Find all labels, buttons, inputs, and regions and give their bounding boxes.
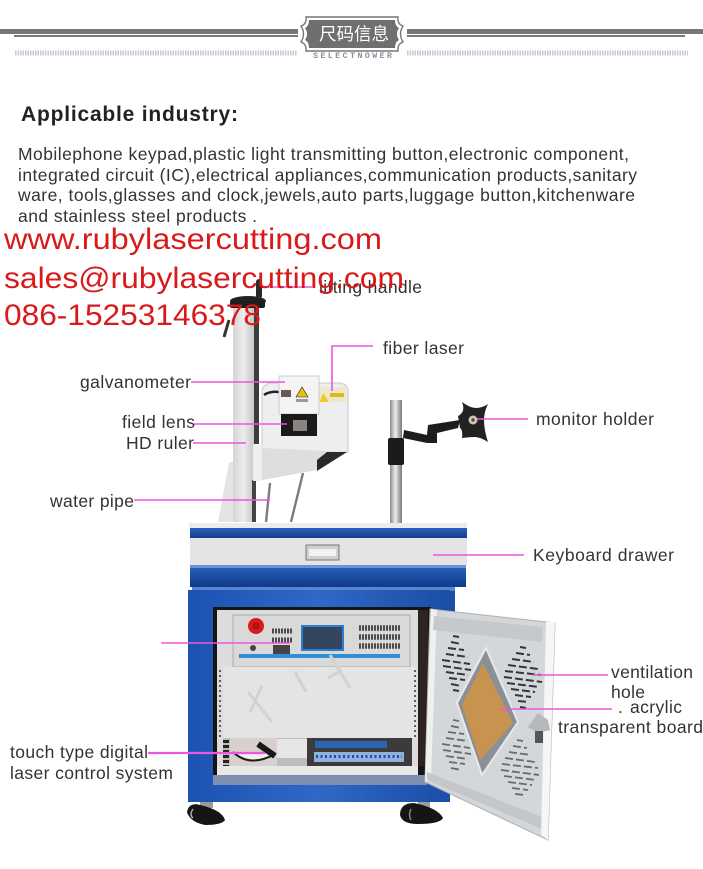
callout: acrylic transparent board: .: [618, 697, 623, 717]
text block: industry description: [17, 144, 637, 226]
text block: industry description: and stainless steel products .: [18, 206, 257, 226]
lower rack components: [230, 738, 412, 766]
callout: lifting handle: lifting handle: [319, 277, 422, 297]
text block: industry description: ware, tools,glasses and clock,jewels,auto parts,luggage button,kitchenware: [17, 185, 635, 205]
caster left: [187, 802, 225, 825]
callout: water pipe: water pipe: [49, 491, 134, 511]
callout: acrylic transparent board: acrylic: [630, 697, 682, 717]
control unit: [233, 615, 410, 667]
callout: ventilation hole: hole: [611, 682, 645, 702]
caster right: [400, 802, 443, 824]
cabinet body: [188, 565, 466, 802]
callout: HD ruler: HD ruler: [126, 433, 194, 453]
text block: industry description: integrated circuit (IC),electrical appliances,communication products,sanitary: [18, 165, 637, 185]
galvanometer box: [279, 376, 319, 414]
ventilation holes: [442, 636, 542, 795]
door: [425, 609, 555, 840]
callout: field lens: field lens: [122, 412, 195, 432]
header badge: [301, 17, 403, 51]
callout: galvanometer: galvanometer: [80, 372, 191, 392]
cabinet top plate: [189, 523, 467, 539]
contact details in red: www.rubylasercutting.com: [3, 223, 382, 256]
header banner: [0, 17, 703, 61]
machine: laser head: [253, 376, 348, 522]
blank rack panel: [220, 655, 417, 738]
contact details in red: sales@rubylasercutting.com: [4, 262, 404, 295]
header badge: 尺码信息: [319, 21, 389, 46]
callout: monitor holder: monitor holder: [536, 409, 654, 429]
callout: touch type digital laser control system: laser control system: [10, 763, 173, 783]
acrylic window: [457, 648, 518, 775]
door lock: [528, 713, 550, 743]
text block: industry description: Mobilephone keypad,plastic light transmitting button,electronic component,: [18, 144, 629, 164]
callout: keyboard drawer: Keyboard drawer: [533, 545, 674, 565]
heading: applicable industry: Applicable industry:: [21, 103, 238, 126]
header subtitle: SELECTNOWER: [313, 51, 393, 61]
callout: HD ruler: [126, 433, 246, 453]
machine: cabinet: [187, 523, 555, 840]
callout: acrylic transparent board: [500, 697, 703, 737]
callout: fiber laser: [332, 338, 464, 391]
keyboard drawer: [190, 538, 467, 565]
machine: laser column: [218, 279, 266, 522]
callout: ventilation hole: ventilation: [611, 662, 693, 682]
callout: acrylic transparent board: transparent board: [558, 717, 703, 737]
field lens: [281, 414, 317, 436]
callout: touch type digital laser control system: touch type digital: [10, 742, 148, 762]
callout: touch type digital laser control system: [10, 742, 265, 783]
contact details in red: [3, 223, 404, 332]
rack frame: [217, 610, 428, 775]
machine: monitor holder: [388, 400, 488, 523]
contact details in red: 086-15253146378: [4, 299, 261, 332]
callout: unlabelled control unit pointer: [161, 642, 290, 644]
callout: fiber laser: fiber laser: [383, 338, 464, 358]
callout: ventilation hole: [532, 662, 693, 702]
